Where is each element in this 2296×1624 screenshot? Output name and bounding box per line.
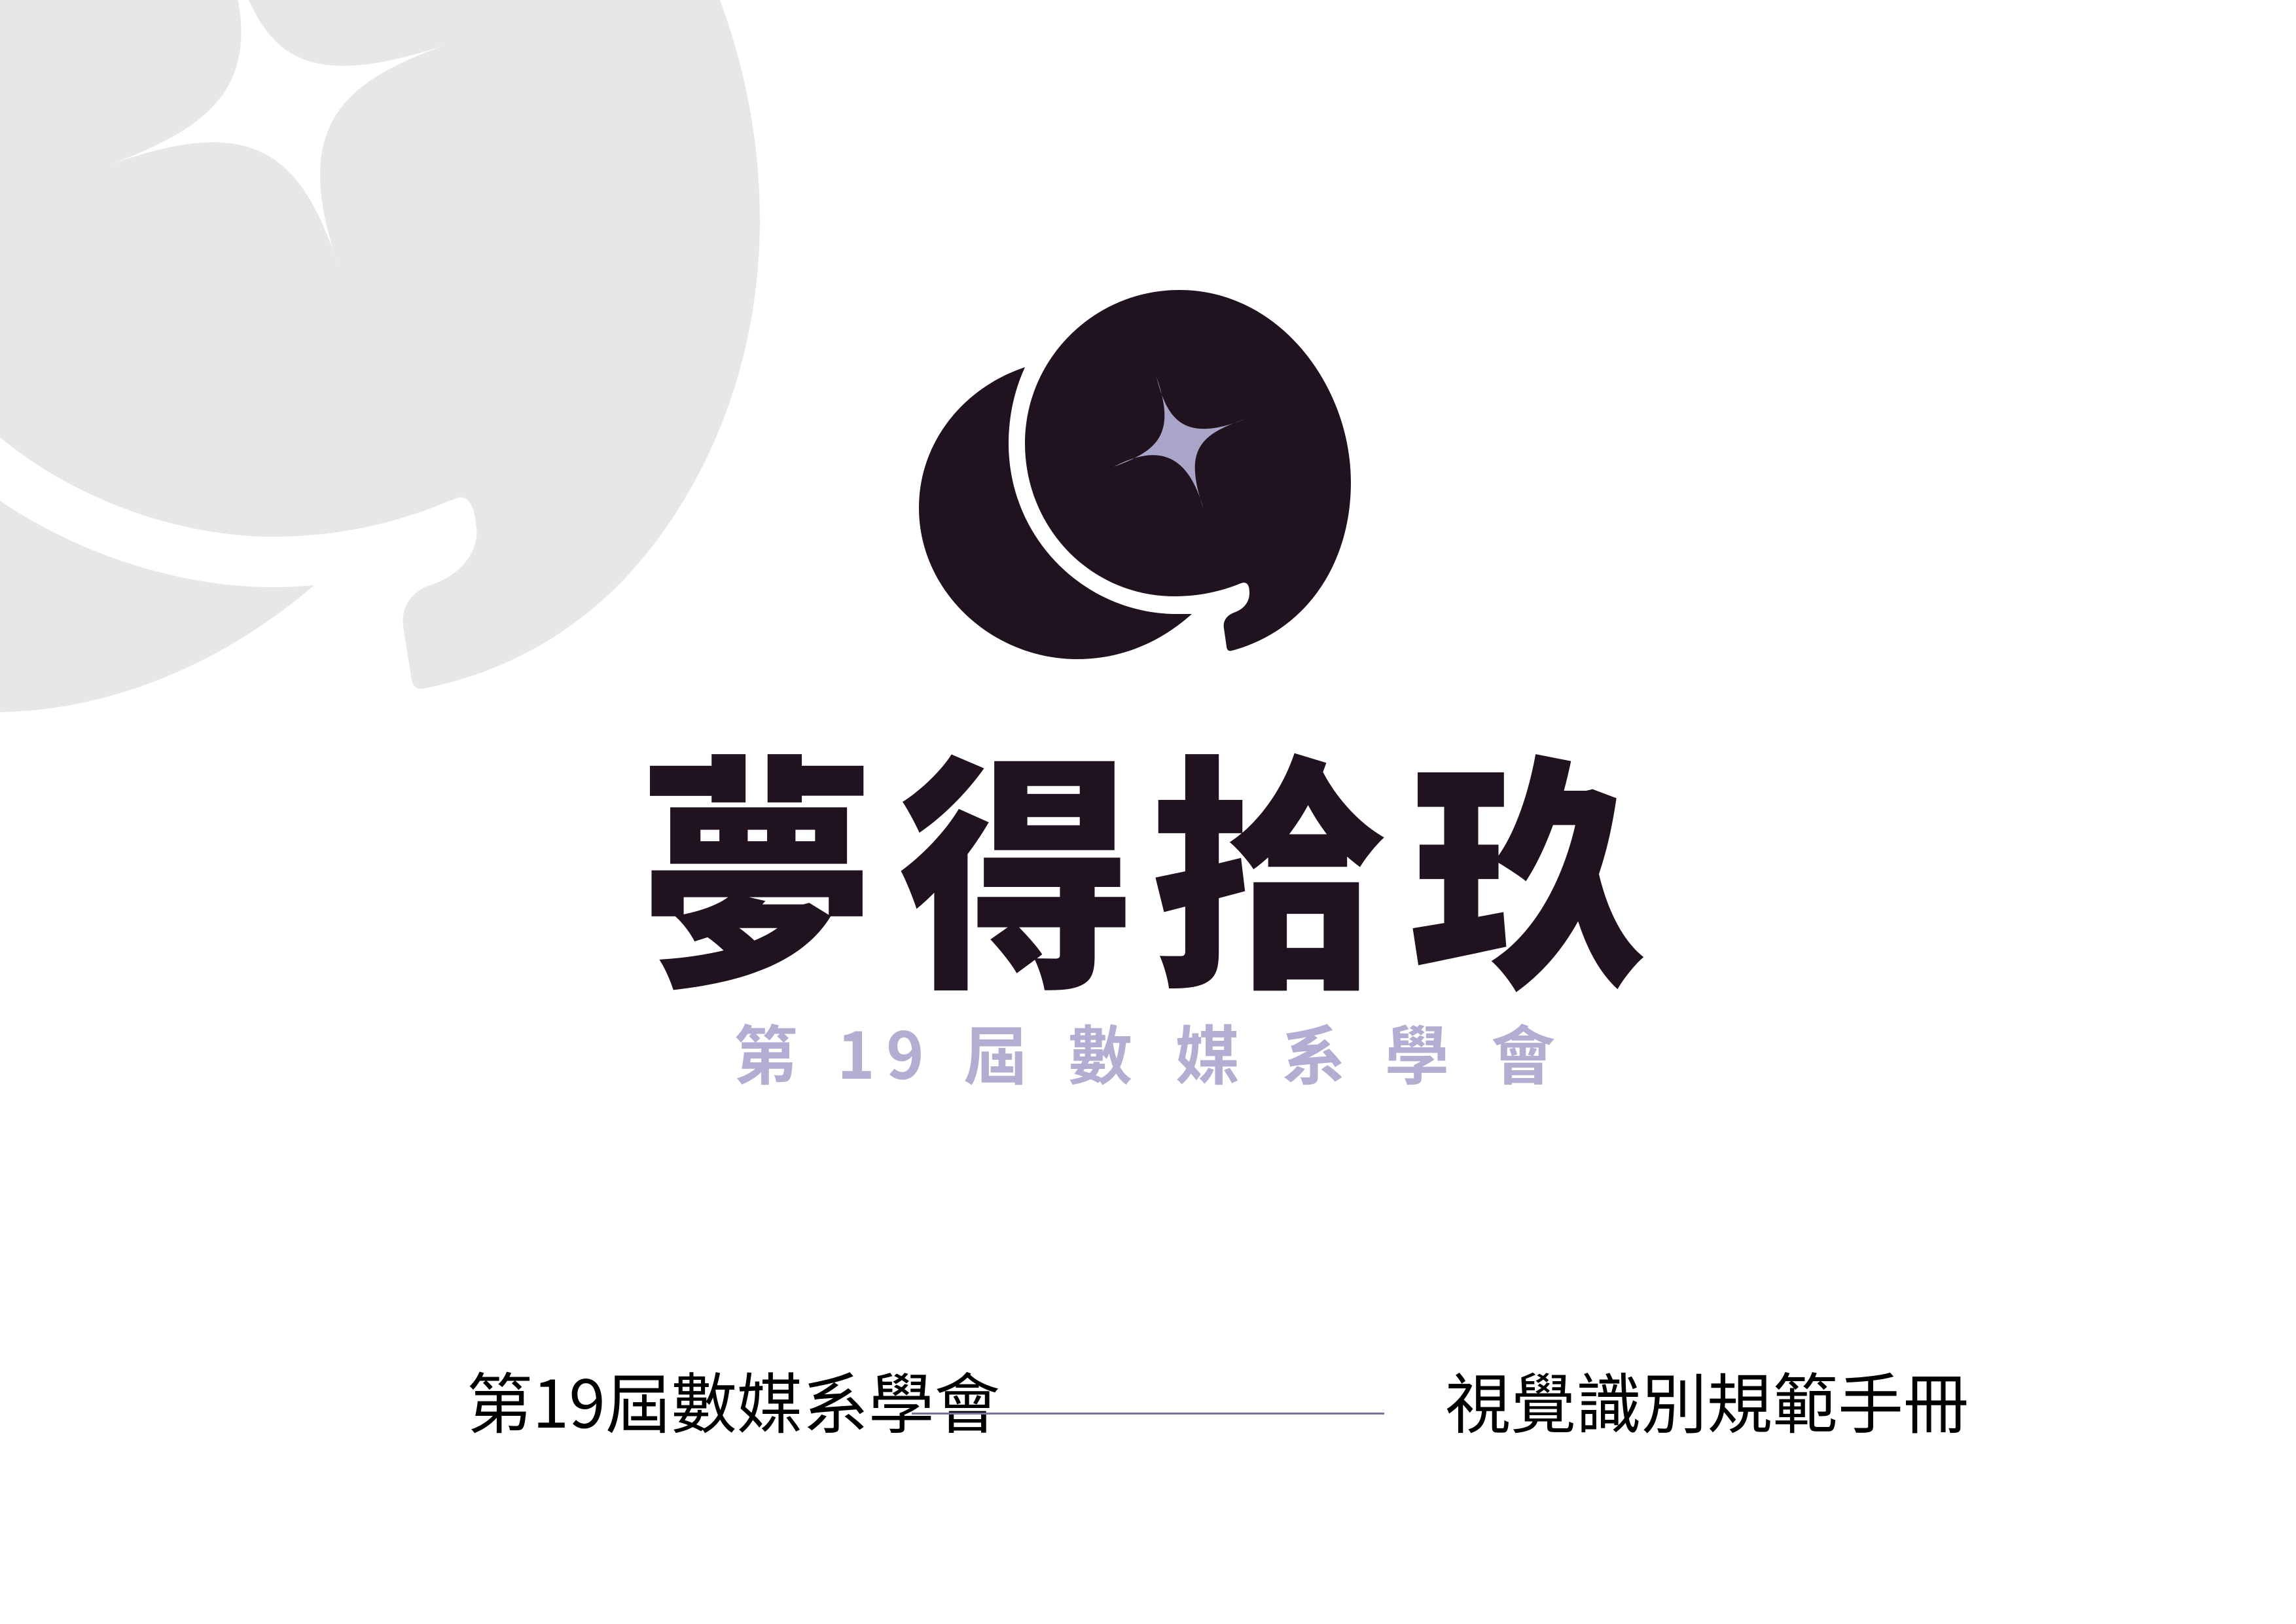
subtitle: 第19屆數媒系學會 (734, 1005, 1555, 1098)
watermark body with star cut-out (0, 0, 760, 689)
logo upper body (1025, 290, 1351, 651)
divider line (912, 1413, 1384, 1415)
logo lower crescent (919, 367, 1192, 659)
watermark lower crescent (0, 501, 314, 712)
icon: four-point star (1114, 377, 1246, 509)
footer left label: 第19屆數媒系學會 (467, 1351, 1000, 1447)
background watermark: enlarged logo mark (0, 0, 760, 712)
title wordmark: 夢得拾玖 (639, 678, 1647, 1039)
footer right label: 視覺識別規範手冊 (1445, 1352, 1969, 1447)
logo mark (919, 290, 1351, 659)
